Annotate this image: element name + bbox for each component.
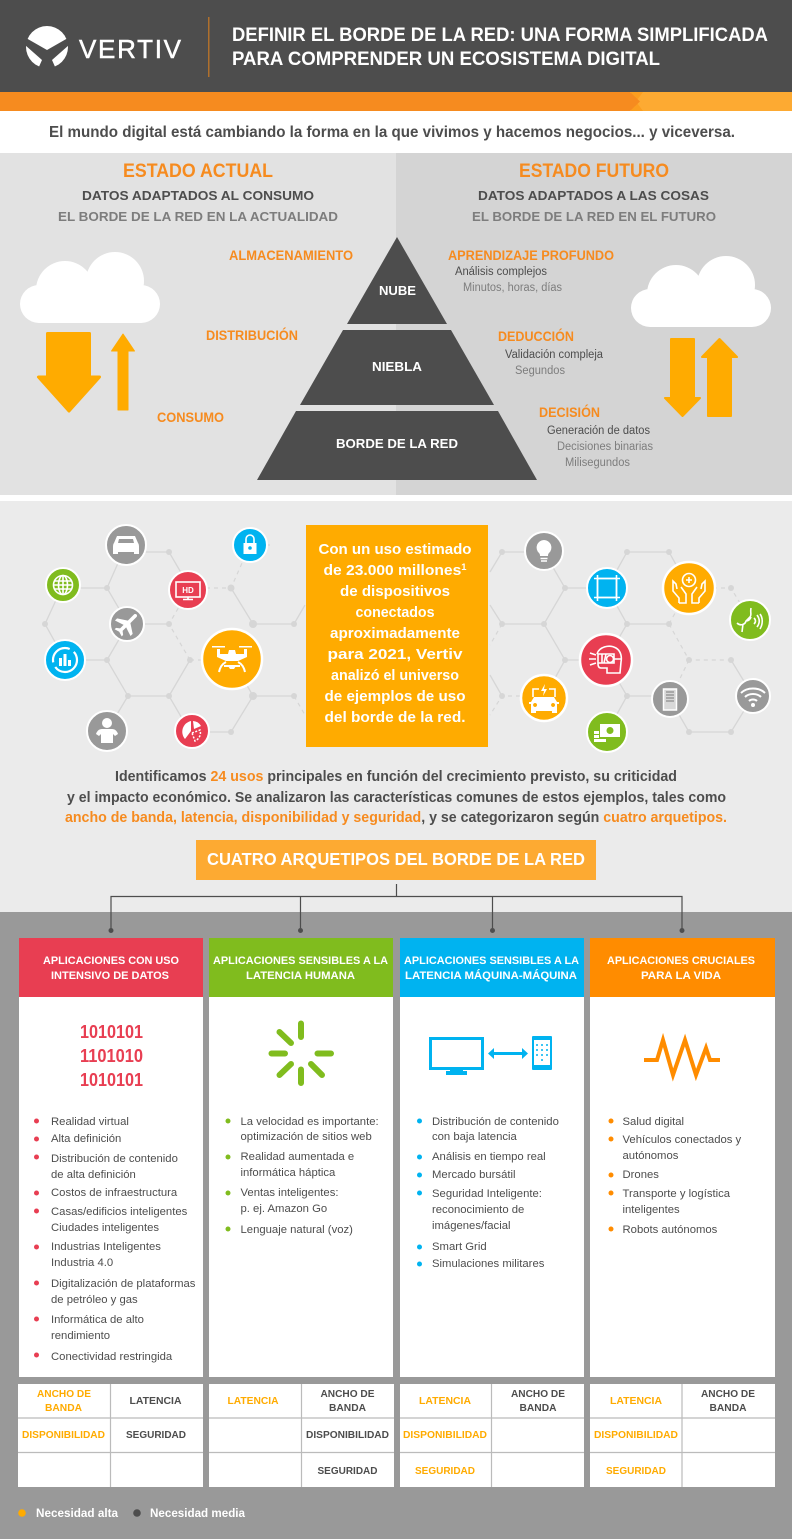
list: Seguridad Inteligente: [432, 1188, 542, 1200]
header band [0, 0, 792, 92]
list: con baja latencia [432, 1131, 518, 1143]
table: necesidades col 3 [400, 1384, 584, 1487]
subtitle: El mundo digital está cambiando la forma en la que vivimos y hacemos negocios... y viceversa. [49, 124, 735, 141]
list: Alta definición [51, 1133, 121, 1145]
icon: person [87, 711, 127, 751]
table: necesidades col 1: LATENCIA [130, 1395, 182, 1407]
card: latencia humana: APLICACIONES SENSIBLES A LA [213, 955, 388, 967]
table: necesidades col 4: SEGURIDAD [606, 1465, 666, 1477]
callout: 23.000 millones: Con un uso estimado [318, 541, 472, 558]
icon: electric car [521, 675, 567, 721]
panel: estado futuro: Análisis complejos [455, 266, 547, 278]
icon: car [106, 525, 146, 565]
list: imágenes/facial [432, 1220, 510, 1232]
list: Salud digital [622, 1116, 684, 1128]
title: DEFINIR EL BORDE DE LA RED: UNA FORMA SIMPLIFICADA [232, 25, 768, 46]
callout: 23.000 millones: aproximadamente [330, 625, 460, 642]
list [417, 1116, 559, 1270]
text: identificamos: y el impacto económico. Se analizaron las características comunes de estos ejemplos, tales como [67, 790, 726, 806]
list: Robots autónomos [622, 1224, 718, 1236]
list: reconocimiento de [432, 1204, 524, 1216]
table: necesidades col 1: ANCHO DE [37, 1388, 91, 1400]
callout: 23.000 millones: de dispositivos [340, 583, 450, 600]
binary icon: 1010101 [80, 1021, 143, 1042]
icon: cloud [631, 256, 771, 327]
list: Lenguaje natural (voz) [240, 1224, 353, 1236]
callout: 23.000 millones: de ejemplos de uso [324, 688, 466, 705]
table: necesidades col 3: DISPONIBILIDAD [403, 1429, 487, 1441]
icon: globe [46, 568, 80, 602]
icon: pulse [644, 1040, 720, 1075]
icon: wifi [736, 679, 770, 713]
table: necesidades col 1 [18, 1384, 203, 1487]
text: identificamos: ancho de banda, latencia, disponibilidad y seguridad, y se categorizaron según cuatro arquetipos. [65, 810, 727, 826]
banner: cuatro arquetipos [196, 840, 596, 880]
connector lines [108, 884, 684, 933]
legend [18, 1506, 245, 1520]
panel: estado actual: ESTADO ACTUAL [123, 161, 273, 182]
orange ribbon [0, 92, 792, 111]
card: cruciales para la vida [590, 938, 775, 1377]
panel: estado futuro: ESTADO FUTURO [519, 161, 669, 182]
binary icon [80, 1021, 143, 1090]
list: Drones [622, 1169, 659, 1181]
network lines left [42, 545, 305, 735]
panel: estado futuro: Decisiones binarias [557, 441, 653, 453]
list [34, 1116, 196, 1363]
table: necesidades col 2 [209, 1384, 394, 1487]
list: Vehículos conectados y [622, 1134, 742, 1146]
callout: 23.000 millones: para 2021, Vertiv [328, 646, 463, 663]
list: de petróleo y gas [51, 1294, 138, 1306]
list: Transporte y logística [622, 1188, 731, 1200]
panel: estado futuro: Validación compleja [505, 349, 604, 361]
list: Análisis en tiempo real [432, 1151, 546, 1163]
icon: drone [202, 629, 262, 689]
network lines right [490, 549, 753, 735]
list: Industrias Inteligentes [51, 1241, 161, 1253]
panel: estado futuro: Generación de datos [547, 425, 650, 437]
panel: estado actual: DISTRIBUCIÓN [206, 328, 298, 343]
list: Simulaciones militares [432, 1258, 545, 1270]
text: identificamos [65, 769, 727, 826]
panel: estado futuro: DEDUCCIÓN [498, 329, 574, 344]
icon: cloud [20, 252, 160, 323]
table: necesidades col 4: LATENCIA [610, 1395, 662, 1407]
list: Costos de infraestructura [51, 1187, 178, 1199]
text: identificamos: Identificamos 24 usos principales en función del crecimiento previsto, su criticidad [115, 769, 677, 785]
table: necesidades col 3: SEGURIDAD [415, 1465, 475, 1477]
arrows: down and up [665, 339, 737, 416]
list: Industria 4.0 [51, 1257, 113, 1269]
list: rendimiento [51, 1330, 110, 1342]
card: cruciales para la vida: PARA LA VIDA [641, 970, 721, 982]
callout: 23.000 millones: conectados [356, 604, 434, 621]
icon: plane [103, 600, 151, 648]
list: inteligentes [622, 1204, 680, 1216]
table: necesidades col 4: DISPONIBILIDAD [594, 1429, 678, 1441]
panel: estado actual: CONSUMO [157, 410, 224, 425]
list: Mercado bursátil [432, 1169, 516, 1181]
table: necesidades col 1: SEGURIDAD [126, 1429, 186, 1441]
panel: estado futuro: DECISIÓN [539, 405, 600, 420]
list: Digitalización de plataformas [51, 1278, 196, 1290]
pyramid: NIEBLA [372, 359, 423, 374]
list: informática háptica [240, 1167, 336, 1179]
list: Smart Grid [432, 1241, 487, 1253]
table: necesidades col 3: LATENCIA [419, 1395, 471, 1407]
list: de alta definición [51, 1169, 136, 1181]
icon: VR headset [580, 634, 632, 686]
pyramid: BORDE DE LA RED [336, 436, 458, 451]
list: autónomos [622, 1150, 679, 1162]
icon: smartphone [652, 681, 688, 717]
table: necesidades col 4: ANCHO DE [701, 1388, 755, 1400]
list: Ciudades inteligentes [51, 1222, 159, 1234]
panel: estado actual: EL BORDE DE LA RED EN LA ACTUALIDAD [58, 209, 338, 224]
panel: dispositivos conectados [0, 501, 792, 912]
card: latencia máquina-máquina [400, 938, 584, 1377]
icon: hands and health [663, 562, 715, 614]
panel: estado futuro: Milisegundos [565, 457, 630, 469]
card: latencia humana: LATENCIA HUMANA [246, 970, 355, 982]
list: p. ej. Amazon Go [240, 1203, 327, 1215]
icon: chart ring [45, 640, 85, 680]
icon: spinner [272, 1024, 331, 1083]
icon: HD screen [169, 571, 207, 609]
card: uso intensivo de datos: APLICACIONES CON USO [43, 955, 179, 967]
callout: 23.000 millones: analizó el universo [331, 667, 459, 684]
arrows: down large, up small [38, 334, 134, 411]
legend: Necesidad media [150, 1506, 245, 1520]
card: uso intensivo de datos: INTENSIVO DE DATOS [51, 970, 169, 982]
card: latencia máquina-máquina: LATENCIA MÁQUINA-MÁQUINA [405, 969, 577, 982]
list: Distribución de contenido [51, 1153, 178, 1165]
icon: HD screen: HD [182, 586, 194, 595]
panel: estado futuro: EL BORDE DE LA RED EN EL FUTURO [472, 209, 716, 224]
table: necesidades col 2: LATENCIA [228, 1395, 279, 1407]
pyramid: NUBE [379, 283, 416, 298]
icon: monitor and phone [430, 1036, 552, 1075]
legend: Necesidad alta [36, 1506, 118, 1520]
panel: estado actual: DATOS ADAPTADOS AL CONSUMO [82, 188, 314, 203]
panel: arquetipos background [0, 912, 792, 1539]
list: Distribución de contenido [432, 1116, 559, 1128]
table: necesidades col 4 [590, 1384, 775, 1487]
icon: money [587, 712, 627, 752]
callout: 23.000 millones [306, 525, 488, 747]
binary icon: 1010101 [80, 1069, 143, 1090]
title [232, 25, 768, 70]
list: Realidad virtual [51, 1116, 129, 1128]
table: necesidades col 1: BANDA [45, 1402, 82, 1414]
banner: cuatro arquetipos: CUATRO ARQUETIPOS DEL BORDE DE LA RED [207, 849, 585, 869]
binary icon: 1101010 [80, 1045, 143, 1066]
list: Informática de alto [51, 1314, 144, 1326]
icon: voice [730, 600, 770, 640]
panel: estado futuro: Minutos, horas, días [463, 282, 562, 294]
table: necesidades col 1: DISPONIBILIDAD [22, 1429, 105, 1441]
table: necesidades col 2: BANDA [329, 1402, 366, 1414]
panel: estado actual [0, 153, 396, 495]
callout: 23.000 millones: de 23.000 millones [324, 562, 456, 579]
card: latencia máquina-máquina: APLICACIONES SENSIBLES A LA [404, 955, 579, 967]
panel: estado futuro [396, 153, 792, 495]
card: uso intensivo de datos [19, 938, 203, 1377]
logo [25, 26, 182, 69]
list [226, 1116, 379, 1236]
panel: estado futuro: DATOS ADAPTADOS A LAS COSAS [478, 188, 709, 203]
list: Casas/edificios inteligentes [51, 1206, 188, 1218]
table: necesidades col 2: ANCHO DE [320, 1388, 374, 1400]
list: La velocidad es importante: [240, 1116, 379, 1128]
list: Ventas inteligentes: [240, 1187, 338, 1199]
table: necesidades col 2: SEGURIDAD [318, 1465, 378, 1477]
list: optimización de sitios web [240, 1131, 372, 1143]
list: Realidad aumentada e [240, 1151, 354, 1163]
pyramid [257, 237, 537, 480]
panel: estado futuro: APRENDIZAJE PROFUNDO [448, 248, 614, 263]
panel: estado actual: ALMACENAMIENTO [229, 248, 353, 263]
callout: 23.000 millones: del borde de la red. [324, 709, 466, 726]
icon: light bulb [525, 532, 563, 570]
list: Conectividad restringida [51, 1351, 173, 1363]
table: necesidades col 3: ANCHO DE [511, 1388, 565, 1400]
table: necesidades col 2: DISPONIBILIDAD [306, 1429, 389, 1441]
list [608, 1116, 742, 1236]
icon: lock [233, 528, 267, 562]
title: PARA COMPRENDER UN ECOSISTEMA DIGITAL [232, 49, 660, 70]
card: cruciales para la vida: APLICACIONES CRUCIALES [607, 955, 755, 967]
icon: pie chart [175, 714, 209, 748]
panel: estado futuro: Segundos [515, 365, 565, 377]
table: necesidades col 3: BANDA [520, 1402, 557, 1414]
card: latencia humana [209, 938, 393, 1377]
callout: 23.000 millones: 1 [461, 562, 466, 572]
table: necesidades col 4: BANDA [710, 1402, 747, 1414]
logo: VERTIV [79, 34, 182, 64]
icon: square frame [587, 568, 627, 608]
